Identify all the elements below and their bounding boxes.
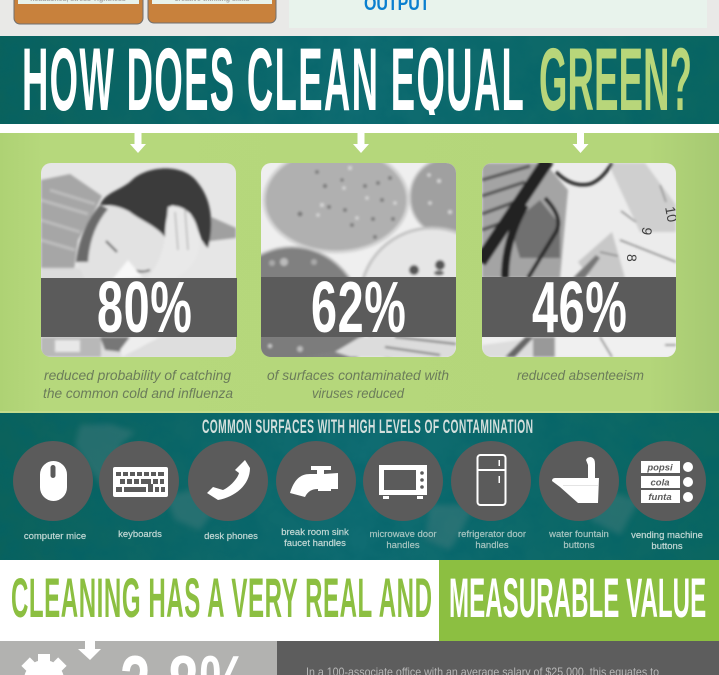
white divider bbox=[0, 124, 719, 133]
arrow 3 bbox=[572, 133, 588, 153]
caption: 46%: reduced absenteeism bbox=[517, 367, 644, 383]
orange card left bbox=[14, 0, 143, 24]
stat band: 46%: 46% bbox=[532, 267, 627, 347]
item: refrigerator: refrigerator door bbox=[458, 529, 526, 540]
heading banner: measurable value: MEASURABLE VALUE bbox=[449, 568, 706, 630]
photo clock numerals: 9 bbox=[638, 226, 656, 237]
item: microwave: handles bbox=[386, 540, 420, 551]
item: water fountain: water fountain bbox=[548, 529, 609, 540]
item: vending machine: buttons bbox=[651, 541, 683, 552]
item: computer mice: computer mice bbox=[24, 531, 86, 542]
photo: petri dishes bbox=[261, 163, 456, 357]
item: refrigerator: handles bbox=[475, 540, 509, 551]
stat band: 46% bbox=[482, 267, 676, 347]
panel: green statistics bbox=[0, 133, 719, 412]
item: microwave: microwave door bbox=[369, 529, 437, 540]
title banner: HOW DOES CLEAN EQUAL bbox=[22, 30, 524, 130]
title banner bbox=[0, 36, 719, 124]
caption: 80%: reduced probability of catching bbox=[44, 367, 231, 383]
item: microwave bbox=[363, 441, 443, 551]
panel: stat gray bbox=[0, 640, 277, 675]
stat band: 80%: 80% bbox=[97, 267, 192, 347]
heading banner: measurable value: CLEANING HAS A VERY REAL AND bbox=[11, 568, 432, 630]
icon: gear bbox=[21, 654, 67, 675]
caption: 62%: of surfaces contaminated with bbox=[267, 367, 449, 383]
orange card right bbox=[148, 0, 276, 23]
photo: sick woman bbox=[41, 163, 236, 357]
item: vending machine: popsi bbox=[646, 462, 673, 474]
item: vending machine: funta bbox=[648, 492, 672, 503]
item: keyboards: keyboards bbox=[118, 529, 162, 540]
item: faucet handles bbox=[276, 441, 356, 549]
arrow 2 bbox=[353, 133, 369, 153]
stat band: 62% bbox=[261, 267, 456, 347]
caption: 80%: the common cold and influenza bbox=[43, 385, 233, 401]
top strip: previous section remainder bbox=[0, 0, 719, 36]
item: refrigerator bbox=[451, 441, 531, 551]
heading banner: measurable value bbox=[0, 560, 719, 641]
item: vending machine: cola bbox=[650, 478, 670, 488]
faint world map bbox=[75, 424, 640, 550]
stat band: 62%: 62% bbox=[311, 267, 406, 347]
photo: glasses, money and clock bbox=[480, 160, 681, 357]
title banner: GREEN? bbox=[539, 30, 692, 130]
panel: common surfaces bbox=[0, 411, 719, 560]
item: keyboards bbox=[99, 441, 179, 540]
photo clock numerals: 8 bbox=[624, 254, 640, 262]
item: desk phones: desk phones bbox=[204, 531, 258, 542]
item: water fountain: buttons bbox=[563, 540, 595, 551]
item: faucet handles: faucet handles bbox=[284, 538, 346, 549]
caption: 62%: viruses reduced bbox=[312, 385, 405, 401]
photo clock numerals: 10 bbox=[662, 205, 681, 223]
arrow down bbox=[78, 641, 101, 660]
item: water fountain bbox=[539, 441, 619, 551]
output panel bbox=[289, 0, 707, 28]
item: vending machine: vending machine bbox=[631, 530, 703, 541]
item: desk phones bbox=[188, 441, 268, 542]
item: faucet handles: break room sink bbox=[281, 527, 349, 538]
caption: 62% bbox=[267, 367, 449, 401]
stat band: 80% bbox=[41, 267, 237, 347]
heading: surfaces: COMMON SURFACES WITH HIGH LEVELS OF CONTAMINATION bbox=[202, 417, 533, 438]
caption: 80% bbox=[43, 367, 233, 401]
photo clock numerals bbox=[627, 207, 676, 262]
item: vending machine bbox=[626, 441, 706, 552]
item: computer mice bbox=[13, 441, 93, 542]
panel: equation text bbox=[277, 641, 719, 675]
arrow 1 bbox=[130, 133, 146, 153]
